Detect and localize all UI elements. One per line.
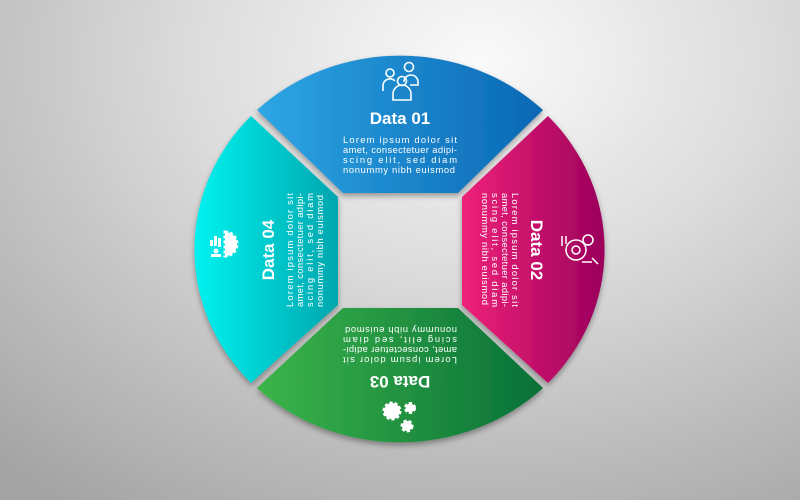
title: Data 01	[370, 109, 430, 128]
title + text block: Data 04	[259, 219, 278, 280]
title + text block	[259, 193, 325, 307]
panel: Data 01 (top, blue)	[257, 56, 543, 193]
title + text block: Data 03	[370, 372, 430, 391]
title + text block	[343, 325, 457, 391]
panel: Data 02 (right, pink)	[462, 116, 605, 383]
icon: gears	[384, 403, 414, 431]
panel: Data 03 (bottom, green)	[257, 308, 543, 442]
title + text block	[480, 193, 546, 307]
icon: gear chart	[210, 232, 237, 257]
text block	[343, 134, 457, 175]
panel: Data 04 (left, cyan)	[194, 116, 338, 383]
icon: people	[383, 62, 418, 100]
title + text block: Data 02	[527, 220, 546, 280]
icon: gear with robot	[562, 235, 598, 264]
